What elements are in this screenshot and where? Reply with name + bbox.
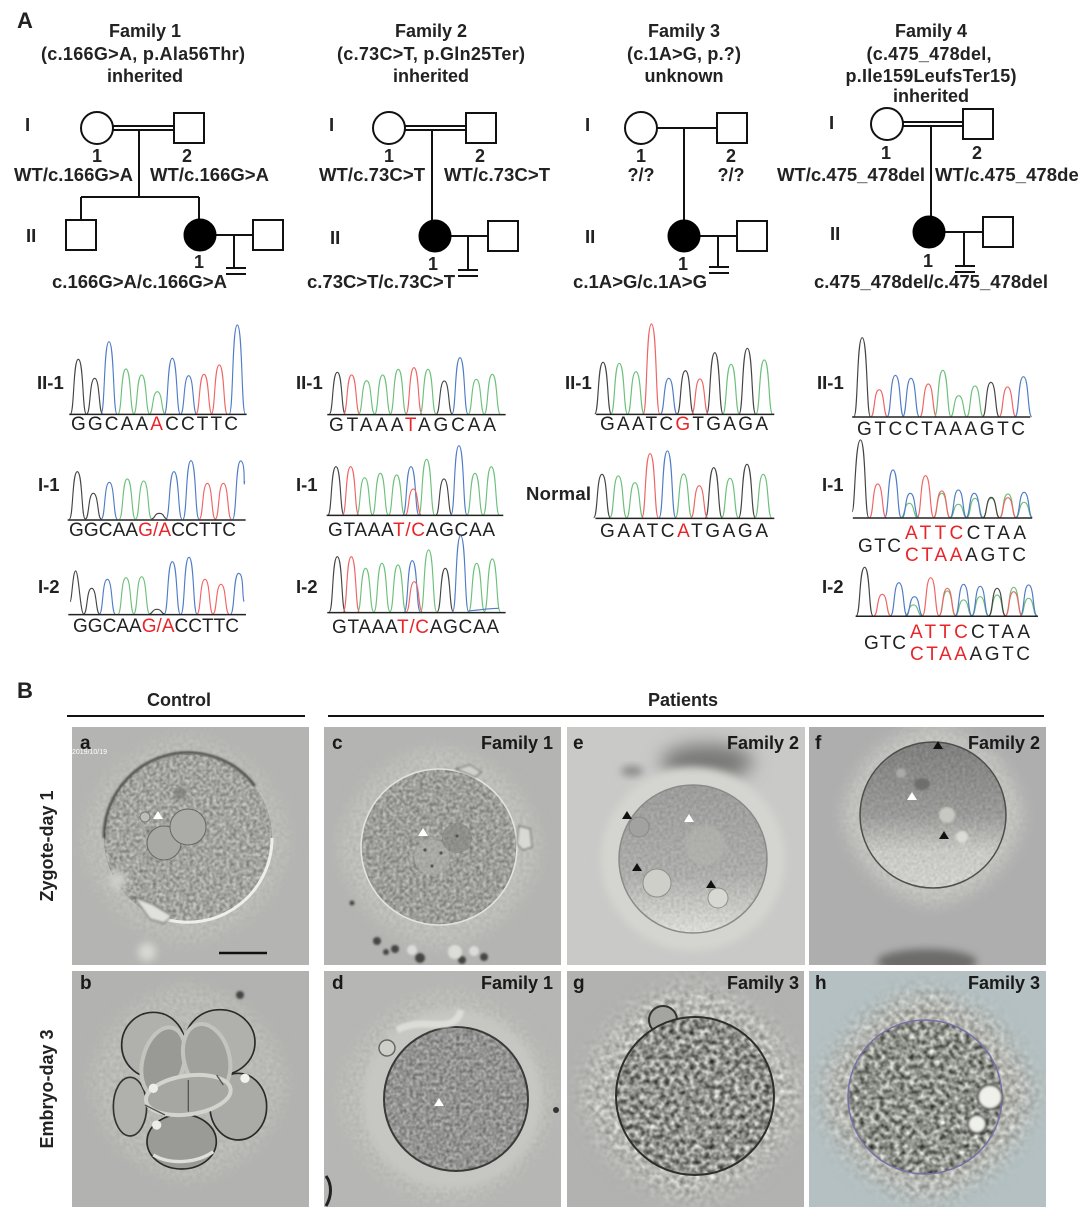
family 4 genotype labels: 2 [972,143,982,163]
family 4 genotype labels [777,112,1080,292]
family 1 genotype labels: WT/c.166G>A [14,164,133,185]
family 2 genotype labels [307,114,551,292]
chromatogram F4 I-2: I-2 [822,576,844,597]
family 4 pedigree symbols [871,108,1013,272]
micrograph b: control embryo [72,971,309,1207]
family 3 genotype labels: I [585,114,590,135]
family 2 chromatograms [296,358,506,638]
panel label A: A [17,8,33,33]
micrograph f: family 2 zygote [809,727,1046,965]
micrograph e: family 2 zygote [567,727,805,965]
chromatogram F4 I-2 [822,567,1038,665]
chromatogram F2 II-1: GTAAATAGCAA [329,415,496,436]
chromatogram F1 I-1: GGCAAG/ACCTTC [69,520,236,541]
family 2 genotype labels: 1 [428,254,438,274]
chromatogram F2 I-1: I-1 [296,474,318,495]
family 1 heading: Family 1 [109,21,181,41]
sequence F4 I-2: CTAAAGTC [910,644,1030,665]
family 4 genotype labels: WT/c.475_478del [935,164,1080,185]
family 1 pedigree [14,21,283,292]
family 1 pedigree symbols [66,112,283,274]
family 2 pedigree [307,21,551,292]
family 3 genotype labels: 1 [636,146,646,166]
family 3 pedigree [573,21,767,292]
chromatogram F4 II-1: II-1 [817,372,844,393]
micrograph b: control embryo: b [80,973,92,994]
family 3 genotype labels: 2 [726,146,736,166]
panel label B: B [17,678,33,703]
family 4 heading [846,21,1016,106]
family 1 genotype labels [14,114,269,292]
sequence F4 I-2: ATTCCTAA [910,622,1030,643]
micrograph c: family 1 zygote [324,727,561,965]
sequence F4 I-1: GTC [858,536,901,557]
chromatogram F2 II-1: II-1 [296,372,323,393]
family 3 heading: Family 3 [648,21,720,41]
chromatogram F3 II-1 [565,324,774,435]
chromatogram F3 Normal: GAATCATGAGA [600,521,768,542]
chromatogram F2 I-2: I-2 [296,576,318,597]
family 2 genotype labels: II [330,227,340,248]
family 1 chromatograms [37,325,247,637]
family 1 heading: (c.166G>A, p.Ala56Thr) [41,44,245,64]
family 4 heading: p.Ile159LeufsTer15) [846,66,1016,86]
family 4 genotype labels: I [829,112,834,133]
micrograph g: family 3 oocyte [567,971,804,1207]
family 1 genotype labels: 1 [194,252,204,272]
family 4 heading: inherited [893,86,969,106]
micrograph d: family 1 oocyte: Family 1 [481,973,553,993]
chromatogram F4 I-1: I-1 [822,474,844,495]
family 2 heading: Family 2 [395,21,467,41]
family 1 heading: inherited [107,66,183,86]
micrograph g: family 3 oocyte: g [573,973,585,994]
family 3 heading [627,21,741,86]
micrograph d: family 1 oocyte [324,971,561,1207]
family 3 chromatograms [526,324,774,542]
family 1 genotype labels: 1 [92,146,102,166]
micrograph f: family 2 zygote: Family 2 [968,733,1040,753]
sequence F4 I-1: ATTCCTAA [905,523,1026,544]
family 2 heading: inherited [393,66,469,86]
micrograph e: family 2 zygote: Family 2 [727,733,799,753]
micrograph d: family 1 oocyte: d [332,973,344,994]
family 1 genotype labels: II [26,225,36,246]
family 3 pedigree symbols [625,112,767,273]
chromatogram F3 II-1: GAATCGTGAGA [600,414,768,435]
family 2 genotype labels: WT/c.73C>T [319,164,426,185]
family 1 heading [41,21,245,86]
chromatogram F1 I-2: I-2 [38,576,60,597]
family 4 genotype labels: WT/c.475_478del [777,164,925,185]
family 1 genotype labels: WT/c.166G>A [150,164,269,185]
chromatogram F2 II-1 [296,358,506,436]
family 4 heading: (c.475_478del, [866,44,992,64]
chromatogram F3 Normal [526,451,774,542]
micrograph h: family 3 oocyte: Family 3 [968,973,1040,993]
family 2 heading [337,21,525,86]
family 2 genotype labels: 1 [384,146,394,166]
family 1 genotype labels: 2 [182,146,192,166]
chromatogram F1 II-1 [37,325,247,435]
micrograph h: family 3 oocyte [809,971,1046,1207]
micrograph a: control zygote [72,727,309,965]
family 4 genotype labels: c.475_478del/c.475_478del [814,271,1048,292]
chromatogram F2 I-2 [296,536,506,638]
chromatogram F3 II-1: II-1 [565,372,592,393]
micrograph c: family 1 zygote: c [332,733,343,754]
family 3 genotype labels: c.1A>G/c.1A>G [573,271,707,292]
family 4 heading: Family 4 [895,21,967,41]
column header: Patients: Patients [648,690,718,710]
chromatogram F2 I-2: GTAAAT/CAGCAA [332,617,499,638]
family 3 heading: (c.1A>G, p.?) [627,44,741,64]
family 3 genotype labels: II [585,226,595,247]
chromatogram F1 I-2 [38,557,246,637]
micrograph a: control zygote: 2019/10/19 [72,749,107,756]
family 4 genotype labels: 1 [881,143,891,163]
micrograph g: family 3 oocyte: Family 3 [727,973,799,993]
family 3 genotype labels: ?/? [718,165,744,185]
family 3 genotype labels: 1 [678,254,688,274]
family 3 genotype labels: ?/? [628,165,654,185]
family 2 genotype labels: c.73C>T/c.73C>T [307,271,456,292]
family 4 chromatograms [817,338,1038,665]
family 2 genotype labels: 2 [475,146,485,166]
chromatogram F4 II-1 [817,338,1032,440]
chromatogram F2 I-1: GTAAAT/CAGCAA [328,520,495,541]
sequence F4 I-2: GTC [864,633,906,654]
column header: Control: Control [147,690,211,710]
chromatogram F4 I-1 [822,440,1032,566]
family 2 pedigree symbols [373,112,518,276]
micrograph f: family 2 zygote: f [815,733,822,754]
family 4 genotype labels: II [830,223,840,244]
row label: Embryo-day 3: Embryo-day 3 [37,1029,57,1149]
micrograph e: family 2 zygote: e [573,733,584,754]
chromatogram F1 II-1: GGCAAACCTTC [71,414,238,435]
sequence F4 I-1: CTAAAGTC [905,545,1026,566]
sequence F4 I-2 [864,622,1030,665]
chromatogram F1 I-1 [38,461,246,541]
sequence F4 I-1 [858,523,1026,566]
chromatogram F1 II-1: II-1 [37,372,64,393]
chromatogram F1 I-1: I-1 [38,474,60,495]
family 3 heading: unknown [644,66,724,86]
micrograph c: family 1 zygote: Family 1 [481,733,553,753]
family 2 genotype labels: WT/c.73C>T [444,164,551,185]
chromatogram F4 II-1: GTCCTAAAGTC [857,419,1025,440]
micrograph a: control zygote: a [80,733,91,754]
family 2 genotype labels: I [329,114,334,135]
family 4 pedigree [777,21,1080,292]
family 2 heading: (c.73C>T, p.Gln25Ter) [337,44,525,64]
family 1 genotype labels: c.166G>A/c.166G>A [52,271,227,292]
chromatogram F3 Normal: Normal [526,483,591,504]
family 1 genotype labels: I [25,114,30,135]
family 3 genotype labels [573,114,744,292]
micrograph h: family 3 oocyte: h [815,973,827,994]
chromatogram F1 I-2: GGCAAG/ACCTTC [73,616,239,637]
family 4 genotype labels: 1 [923,251,933,271]
chromatogram F2 I-1 [296,446,503,541]
row label: Zygote-day 1: Zygote-day 1 [37,790,57,902]
